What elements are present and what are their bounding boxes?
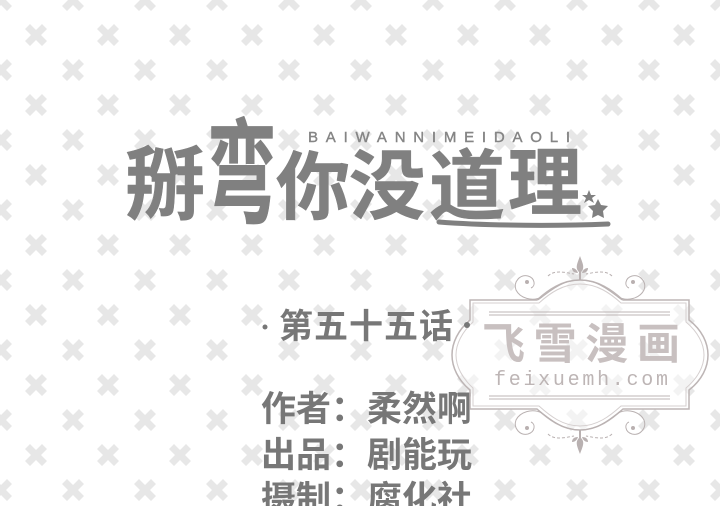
title: stylised characters: 理 (508, 142, 582, 225)
heading: text: 第五十五话 (279, 308, 454, 346)
title: stylised characters: 道 (429, 145, 505, 230)
title: pinyin subtitle: BAIWANNIMEIDAOLI (308, 129, 570, 146)
badge: top ornament (515, 256, 645, 300)
credits: 柔然啊 (367, 390, 472, 429)
title: underline (439, 222, 608, 225)
title: stylised characters: 掰 (125, 141, 205, 230)
badge: name: 飞雪漫画 (482, 321, 680, 369)
badge: bottom ornament (515, 410, 645, 454)
title: stylised characters (125, 112, 582, 238)
title: stars (582, 190, 608, 218)
credits (261, 390, 472, 506)
watermark badge (452, 256, 708, 454)
credits: 剧能玩 (367, 436, 472, 475)
title logo (125, 112, 608, 238)
title: stylised characters: 你 (276, 146, 350, 229)
badge: rules (489, 312, 670, 399)
badge: frame (452, 280, 708, 430)
badge: dot (464, 322, 470, 328)
credit: author: 作者： (261, 390, 366, 429)
credit: producer: 出品： (261, 436, 366, 475)
title: stylised characters: 没 (349, 145, 425, 230)
heading: leading dot (262, 324, 268, 330)
episode heading (262, 308, 454, 346)
title: stylised characters: 弯 (207, 112, 277, 238)
badge: url: feixuemh.com (494, 369, 668, 392)
